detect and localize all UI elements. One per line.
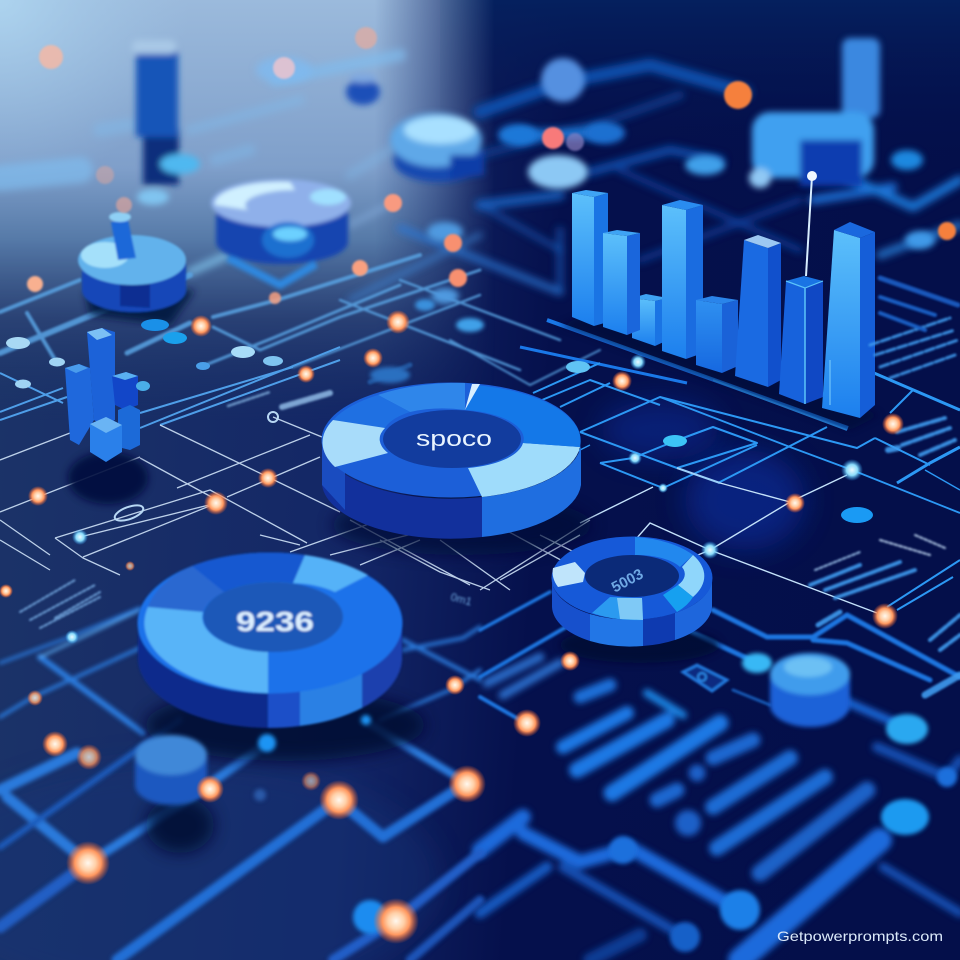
ring chart: spoco [322, 382, 581, 539]
bar chart [560, 171, 880, 430]
white junction nodes [65, 354, 863, 644]
bar 5 [696, 296, 738, 373]
blurred bar list, lower right [487, 657, 867, 873]
pads around sky objects [256, 57, 312, 83]
pie chart shadow, centre right [560, 627, 720, 663]
ring slit [465, 384, 480, 410]
ring label: 5003 [609, 566, 646, 596]
blurred traces, lower right [480, 702, 960, 960]
light haze traces in the sky area [0, 55, 400, 272]
cylinder shadow, left [146, 797, 214, 853]
left bar [65, 364, 94, 445]
small sharp node dots [6, 319, 873, 523]
blue node dots [254, 299, 957, 952]
pie chart shadow, lower left [145, 689, 425, 761]
ring side wall [552, 578, 712, 647]
bar 1 [572, 190, 608, 326]
bar 4 [662, 200, 703, 359]
blurred background circuit traces [350, 65, 960, 300]
front bar [90, 417, 122, 462]
soft traces, upper left board [0, 255, 600, 385]
ring hole [383, 410, 521, 468]
bright circuit lines around the chart [520, 320, 960, 610]
small text blocks [20, 278, 960, 695]
ring segments [552, 536, 712, 620]
orange glowing nodes [0, 310, 904, 944]
thin white lines, lower right [580, 475, 877, 613]
blurred disc with peg [78, 212, 195, 325]
ring label: spoco [416, 426, 492, 451]
blurred right-hand towers [427, 38, 935, 304]
small labels: 0m1 [449, 591, 473, 608]
ring segments [138, 552, 402, 694]
flat blurred orange nodes, far background [27, 27, 956, 304]
double blue lines left board [0, 347, 340, 428]
ring chart: 9236 [138, 552, 402, 728]
bar 2 [603, 230, 640, 335]
right bar [112, 372, 138, 410]
ring chart: small [552, 536, 712, 647]
ring side wall [322, 440, 581, 539]
small isometric bar cluster [65, 328, 148, 504]
bar 8 [822, 222, 875, 418]
bar 6 [735, 235, 781, 387]
thin white circuit lines, mid-left [0, 417, 590, 590]
lower right bar [118, 405, 140, 450]
ring hole [585, 555, 679, 597]
blue cylinder, left [135, 735, 207, 805]
blurred disc, upper left [211, 179, 351, 285]
bar 7 [779, 276, 823, 404]
ring segments [322, 382, 581, 498]
tall bar [87, 328, 115, 425]
ring hole [203, 582, 343, 652]
ring side wall [138, 625, 402, 728]
icon: small pill badge [113, 412, 278, 524]
blue cylinder, right [770, 653, 850, 727]
blurred disc, top centre [390, 113, 484, 182]
glowing traces, lower left [0, 608, 480, 960]
background cylinder tower [132, 40, 200, 205]
small blurred cylinder [346, 73, 380, 105]
icon: badge [683, 665, 727, 691]
shadow under bars [560, 310, 880, 430]
glowing circuit traces, lower right [480, 592, 960, 720]
ring label: 9236 [236, 606, 314, 637]
pie chart shadow, large [332, 495, 592, 555]
pointer pin [806, 171, 817, 276]
watermark: Getpowerprompts.com [777, 928, 943, 944]
bar 3 [632, 294, 668, 346]
